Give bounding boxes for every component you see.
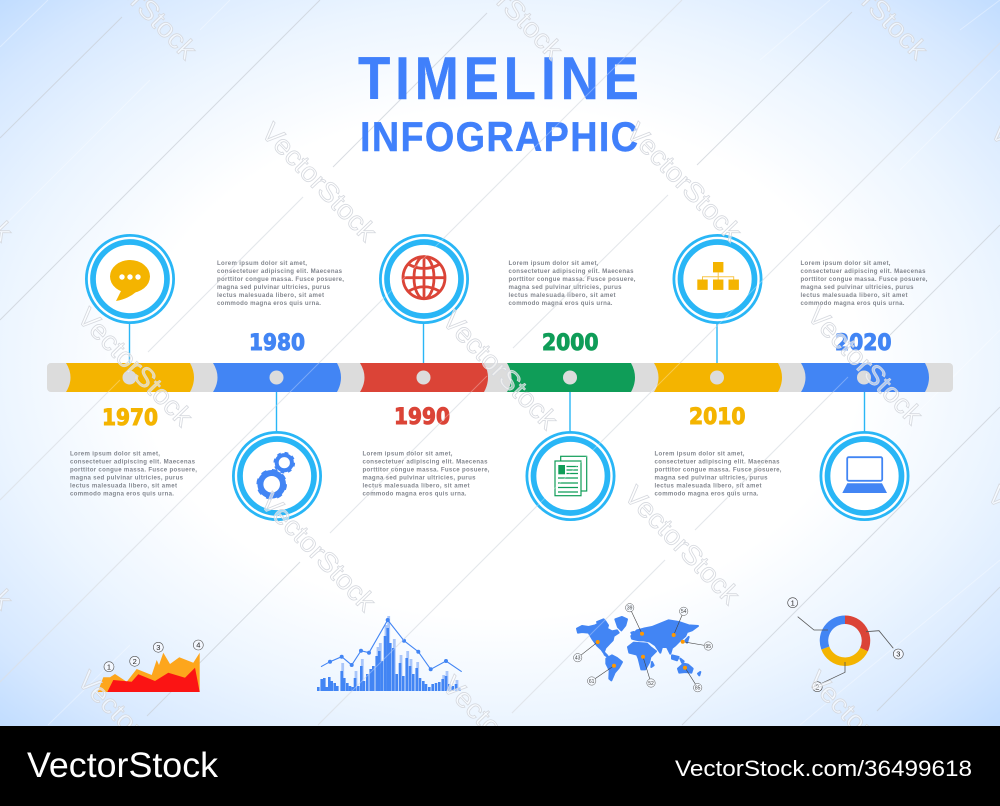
icon: globe [403,257,445,299]
footer image id: VectorStock.com/36499618 [675,756,972,781]
location dots [596,632,687,670]
donut chart [788,598,903,692]
donut label numbers [791,598,900,691]
timeline bar [47,363,953,392]
watermarks: VectorStock [71,665,199,795]
watermarks: VectorStock [618,480,746,610]
text block 2020: Lorem ipsum dolor sit amet, [800,260,891,267]
area chart: 1 [107,662,111,672]
footer brand: VectorStock [27,746,219,785]
title [358,45,644,160]
segment 1990 [360,363,488,392]
year 2000: 2000 [542,331,598,356]
segment 2020 [801,363,929,392]
text block 2020: commodo magna eros quis urna. [800,300,905,307]
area chart: 3 [156,643,160,652]
text block 2010 [654,450,782,498]
watermarks: VectorStock [436,670,564,800]
text block 2010: lectus malesuada libero, sit amet [654,482,762,490]
watermarks: VectorStock [436,305,564,435]
donut label circles [788,598,903,692]
text block 1970: porttitor congue massa. Fusce posuere, [70,466,197,474]
area chart: 4 [196,641,200,650]
bar markers [122,370,871,384]
segment 2010 [654,363,782,392]
text block 1970: consectetuer adipiscing elit. Maecenas [70,458,196,466]
text block 1970: magna sed pulvinar ultricies, purus [70,474,184,482]
text block 1980: porttitor congue massa. Fusce posuere, [217,276,344,283]
trend line [321,620,462,672]
text block 2020: magna sed pulvinar ultricies, purus [800,284,914,291]
text block 2000: Lorem ipsum dolor sit amet, [508,260,599,267]
area chart labels [104,640,203,672]
text block 1990: porttitor congue massa. Fusce posuere, [362,466,490,474]
node 2000: document icon [527,432,614,520]
connector lines [130,323,864,431]
node 1980: gears icon [233,432,321,520]
text block 1990 [362,450,490,498]
node 2010: hierarchy icon [674,235,761,323]
year labels [102,331,892,431]
map label circles [574,604,712,692]
icon: org chart [697,262,739,290]
title line 1: TIMELINE [358,45,644,112]
text block 1980: lectus malesuada libero, sit amet [217,292,324,299]
bar and line chart [318,616,462,691]
icon: documents [555,456,587,496]
text block 2010: commodo magna eros quis urna. [654,490,759,498]
donut blue [824,620,845,648]
text block 2020: lectus malesuada libero, sit amet [800,292,908,299]
donut label numbers: 1 [791,598,795,607]
title line 2: INFOGRAPHIC [360,114,639,160]
text block 2000: consectetuer adipiscing elit. Maecenas [508,268,634,275]
bar track [47,363,953,392]
text block 1970: Lorem ipsum dolor sit amet, [70,450,160,458]
text block 1980: magna sed pulvinar ultricies, purus [217,284,331,291]
icon: laptop [842,457,887,493]
text block 1980: Lorem ipsum dolor sit amet, [217,260,307,267]
text block 2010: magna sed pulvinar ultricies, purus [654,474,768,482]
icon: speech bubble [110,260,150,301]
area chart [98,640,203,692]
text block 2000: porttitor congue massa. Fusce posuere, [508,276,636,283]
watermarks: VectorStock [801,300,929,430]
text block 1970: lectus malesuada libero, sit amet [70,482,177,490]
leader lines [578,608,708,688]
map label numbers: 61 [589,679,595,685]
segment 1980 [213,363,341,392]
watermarks: VectorStock [620,117,748,247]
orange area [98,653,200,692]
year 1990: 1990 [394,405,450,430]
watermarks: VectorStock [71,302,199,432]
text block 1980: commodo magna eros quis urna. [217,300,321,307]
text block 2010: porttitor congue massa. Fusce posuere, [654,466,782,474]
donut yellow [825,648,864,662]
text block 1970 [70,450,197,498]
node 2020: laptop icon [821,432,908,520]
text block 1990: lectus malesuada libero, sit amet [362,482,470,490]
segment 1970 [66,363,194,392]
watermarks: VectorStock [801,665,929,795]
continents [577,617,700,680]
text block 1990: Lorem ipsum dolor sit amet, [362,450,453,458]
watermarks: VectorStock [255,117,383,247]
donut label numbers: 3 [896,650,900,659]
text block 2020: porttitor congue massa. Fusce posuere, [800,276,928,283]
segment 2000 [507,363,635,392]
node 1970: chat icon [86,235,174,323]
map label numbers: 39 [627,606,633,612]
text block 1990: magna sed pulvinar ultricies, purus [362,474,476,482]
watermarks: VectorStock [254,487,382,617]
light bars [343,616,457,691]
text block 1980 [217,260,344,307]
text block 2000 [508,260,636,307]
donut leader lines [798,617,893,683]
map label numbers: 95 [706,644,711,650]
text block 2020: consectetuer adipiscing elit. Maecenas [800,268,926,275]
donut red [845,620,866,650]
map label numbers: 52 [648,681,654,687]
map label numbers: 43 [575,656,581,662]
year 1970: 1970 [102,406,158,431]
red area [107,668,200,692]
trend line points [328,618,448,671]
node 1990: globe icon [380,235,468,323]
text block 1990: consectetuer adipiscing elit. Maecenas [362,458,488,466]
text block 2000: lectus malesuada libero, sit amet [508,292,616,299]
world map [574,604,712,692]
donut label numbers: 2 [815,682,819,691]
map label numbers: 85 [695,686,701,692]
map label numbers [575,606,711,692]
text block 1980: consectetuer adipiscing elit. Maecenas [217,268,343,275]
icon: gears [258,453,294,498]
text block 2020 [800,260,928,307]
text block 1990: commodo magna eros quis urna. [362,490,467,498]
year 2010: 2010 [689,405,746,430]
map label numbers: 54 [681,609,687,615]
text block 2000: magna sed pulvinar ultricies, purus [508,284,622,291]
area chart: 2 [133,657,137,666]
year 1980: 1980 [249,331,305,356]
text block 2010: Lorem ipsum dolor sit amet, [654,450,745,458]
dark bars [318,628,459,691]
year 2020: 2020 [835,331,892,356]
text block 1970: commodo magna eros quis urna. [70,490,174,498]
text block 2000: commodo magna eros quis urna. [508,300,613,307]
footer band [0,726,1000,806]
text block 2010: consectetuer adipiscing elit. Maecenas [654,458,780,466]
